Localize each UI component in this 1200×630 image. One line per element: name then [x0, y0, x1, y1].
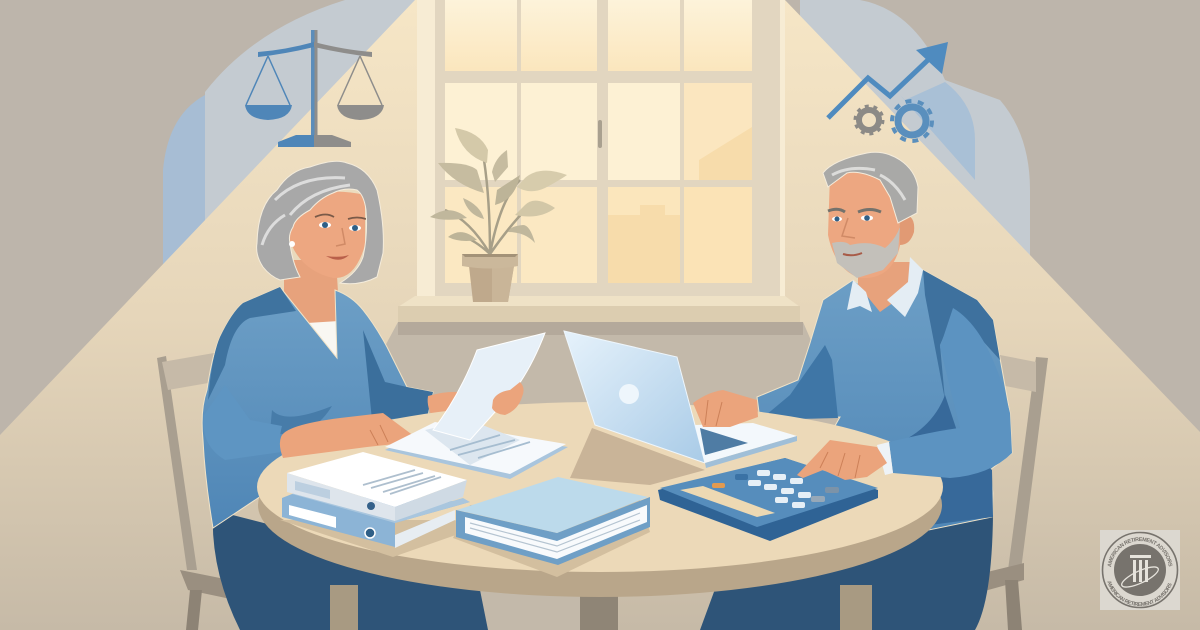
woman: face [288, 192, 365, 278]
woman: forearm sleeve over table [203, 385, 282, 460]
woman: fingers over paper [492, 382, 524, 415]
logo badge: AMERICAN RETIREMENT ADVISORS [1108, 537, 1172, 567]
right arch backdrop [800, 0, 1030, 270]
man: hair [823, 152, 918, 223]
man: beard [832, 227, 900, 278]
icon: balance scales [245, 30, 384, 147]
man: ear [899, 215, 914, 245]
woman: earring [289, 241, 295, 247]
man [700, 152, 1012, 630]
woman: trousers [213, 510, 488, 630]
chair: right [872, 355, 1048, 630]
lower wall beneath the window [340, 322, 850, 630]
window sill [398, 296, 803, 335]
logo badge: AMERICAN RETIREMENT ADVISORS [1107, 582, 1172, 606]
man: hand over laptop [693, 390, 758, 427]
calculator [658, 458, 878, 541]
paper held by woman [433, 333, 545, 440]
woman: hair [257, 161, 383, 284]
man: shirt collar [847, 257, 923, 317]
woman: eyes and mouth [315, 214, 366, 260]
man: cuff [877, 442, 893, 475]
man: eyes and mouth [828, 209, 881, 255]
paper stack on table [385, 420, 568, 479]
laptop [564, 331, 797, 468]
man: front sleeve over table [889, 308, 1012, 478]
logo badge [1100, 530, 1180, 610]
man: neck [858, 262, 918, 312]
calculator: keys [712, 470, 839, 508]
window [417, 0, 785, 305]
woman: blue sweater body [202, 287, 433, 528]
woman [202, 161, 500, 630]
left arch backdrop [163, 0, 420, 270]
woman: white top [307, 321, 339, 358]
man: face [828, 170, 901, 278]
woman: neck and chest [284, 260, 338, 345]
calculator: display [680, 486, 775, 517]
woman: hand holding paper [428, 385, 500, 421]
blue book [456, 477, 650, 565]
man: sweater body [757, 270, 1012, 540]
table top with edge [257, 402, 943, 630]
plant in pot [430, 128, 567, 302]
chair: left [157, 353, 330, 630]
icon: growth arrow and gears [828, 42, 948, 141]
binder stack [282, 452, 470, 548]
man: hand on calculator [797, 440, 887, 480]
man: trousers [700, 515, 993, 630]
woman: hand pointing [280, 413, 422, 458]
